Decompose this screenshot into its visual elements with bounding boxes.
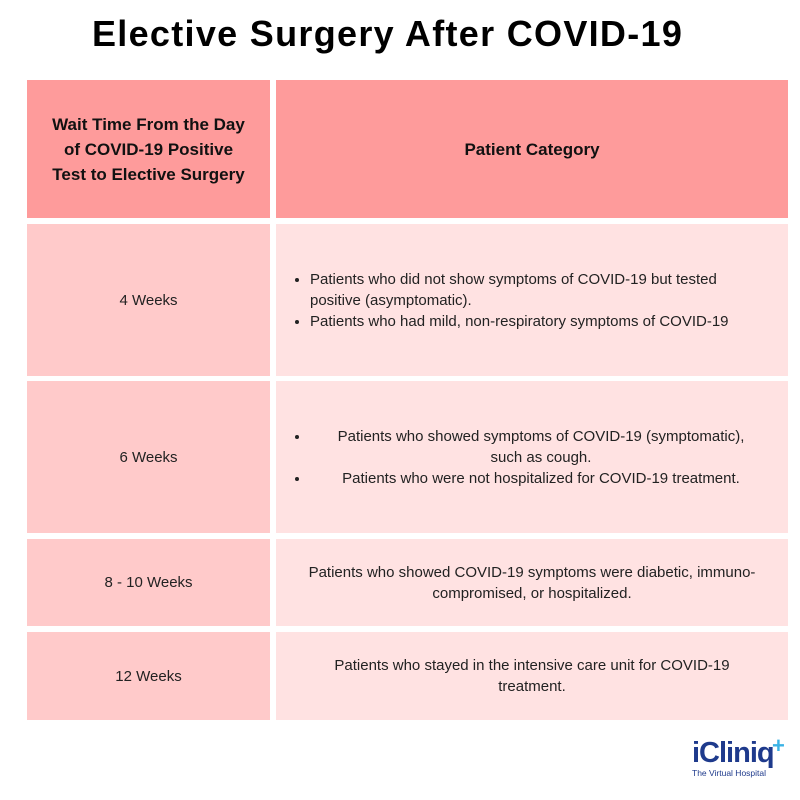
row 2 wait: 6 Weeks [119,448,178,466]
row 4 category [276,632,788,720]
row 1 category: Patients who had mild, non-respiratory symptoms of COVID-19 [310,312,728,330]
row 1 category: Patients who did not show symptoms of COVID-19 but tested [310,270,717,288]
row 4 wait: 12 Weeks [115,668,182,684]
row 3 category: compromised, or hospitalized. [432,584,632,602]
header: wait time: of COVID-19 Positive [64,140,233,158]
header: patient category: Patient Category [464,140,600,158]
row 4 wait [27,632,270,720]
row 2 wait [27,381,270,533]
row 1 wait [27,224,270,376]
logo: + [772,733,785,758]
row 3 wait: 8 - 10 Weeks [104,574,193,591]
row 3 wait [27,539,270,626]
row 2 category: Patients who showed symptoms of COVID-19 (symptomatic), [338,428,744,444]
logo [692,733,785,778]
row 3 category: Patients who showed COVID-19 symptoms were diabetic, immuno- [309,564,755,580]
row 4 category: Patients who stayed in the intensive care unit for COVID-19 treatment. [334,657,730,695]
row 2 category: such as cough. [491,448,591,466]
title: Elective Surgery After COVID-19 [92,13,683,54]
row 1 wait: 4 Weeks [119,292,178,308]
header: wait time: Wait Time From the Day [52,114,245,134]
row 2 category: Patients who were not hospitalized for COVID-19 treatment. [342,470,740,486]
row 2 category [276,381,788,533]
logo: The Virtual Hospital [692,768,766,778]
row 3 category [276,539,788,626]
header: patient category [276,80,788,218]
header: wait time [27,80,270,218]
row 1 category: positive (asymptomatic). [310,292,472,308]
header: wait time: Test to Elective Surgery [52,164,245,184]
logo: iCliniq [692,737,774,769]
row 1 category [276,224,788,376]
